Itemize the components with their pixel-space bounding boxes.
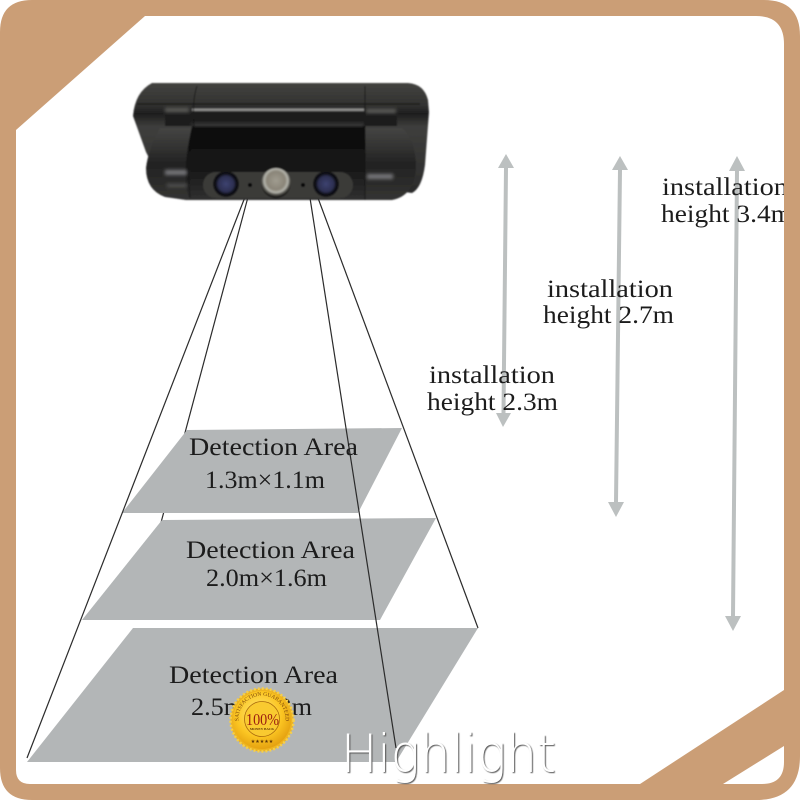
label: detection area 1: Detection Area (189, 434, 358, 461)
guarantee seal: 100% (246, 710, 279, 729)
arrow: height 2.7m (608, 156, 628, 517)
center sensor (261, 168, 291, 198)
left lens (213, 171, 239, 197)
guarantee seal: SATISFACTION GUARANTEED (234, 692, 290, 721)
device front housing (146, 128, 416, 200)
label: detection area 3: Detection Area (169, 662, 338, 689)
detection area: top plane (122, 428, 402, 513)
device highlight bar (192, 108, 364, 111)
device seams (189, 86, 365, 200)
field of view line: inner left (151, 197, 248, 560)
label: detection area 2 (186, 537, 355, 592)
arrow: height 3.4m (725, 156, 745, 631)
label: detection area 1 (189, 434, 358, 494)
label: detection area 3: 2.5m×2.2m (191, 694, 313, 721)
device side highlights (165, 108, 396, 187)
detection area: middle plane (82, 518, 436, 620)
device sensor strip (203, 172, 353, 198)
label: detection area 2: 2.0m×1.6m (206, 565, 328, 592)
label: detection area 2: Detection Area (186, 537, 355, 564)
device seam (137, 103, 420, 105)
guarantee seal (229, 687, 295, 753)
label: installation height 3.4m: installation (662, 174, 789, 201)
arrow: height 2.3m (496, 154, 514, 427)
guarantee seal: MONEY BACK (250, 727, 274, 731)
label: installation height 2.3m (427, 362, 559, 416)
label: detection area 1: 1.3m×1.1m (205, 467, 326, 494)
device back plate (133, 83, 429, 193)
guarantee seal: ★★★★★ (251, 739, 274, 745)
device dark channel (165, 114, 397, 126)
label: installation height 2.3m: height 2.3m (427, 389, 559, 416)
detection area: bottom plane (27, 628, 478, 762)
label: installation height 3.4m: height 3.4m (661, 201, 793, 228)
label: installation height 3.4m (661, 174, 793, 228)
label: detection area 3 (169, 662, 338, 721)
field of view lines (27, 197, 478, 758)
label: installation height 2.3m: installation (429, 362, 556, 389)
camera device (133, 83, 429, 200)
highlight caption: Highlight (341, 724, 556, 785)
label: installation height 2.7m: installation (547, 276, 674, 303)
label: installation height 2.7m (543, 276, 675, 329)
frame right edge over label (784, 60, 800, 680)
label: installation height 2.7m: height 2.7m (543, 302, 675, 329)
right lens (313, 171, 339, 197)
device recess (185, 126, 365, 200)
